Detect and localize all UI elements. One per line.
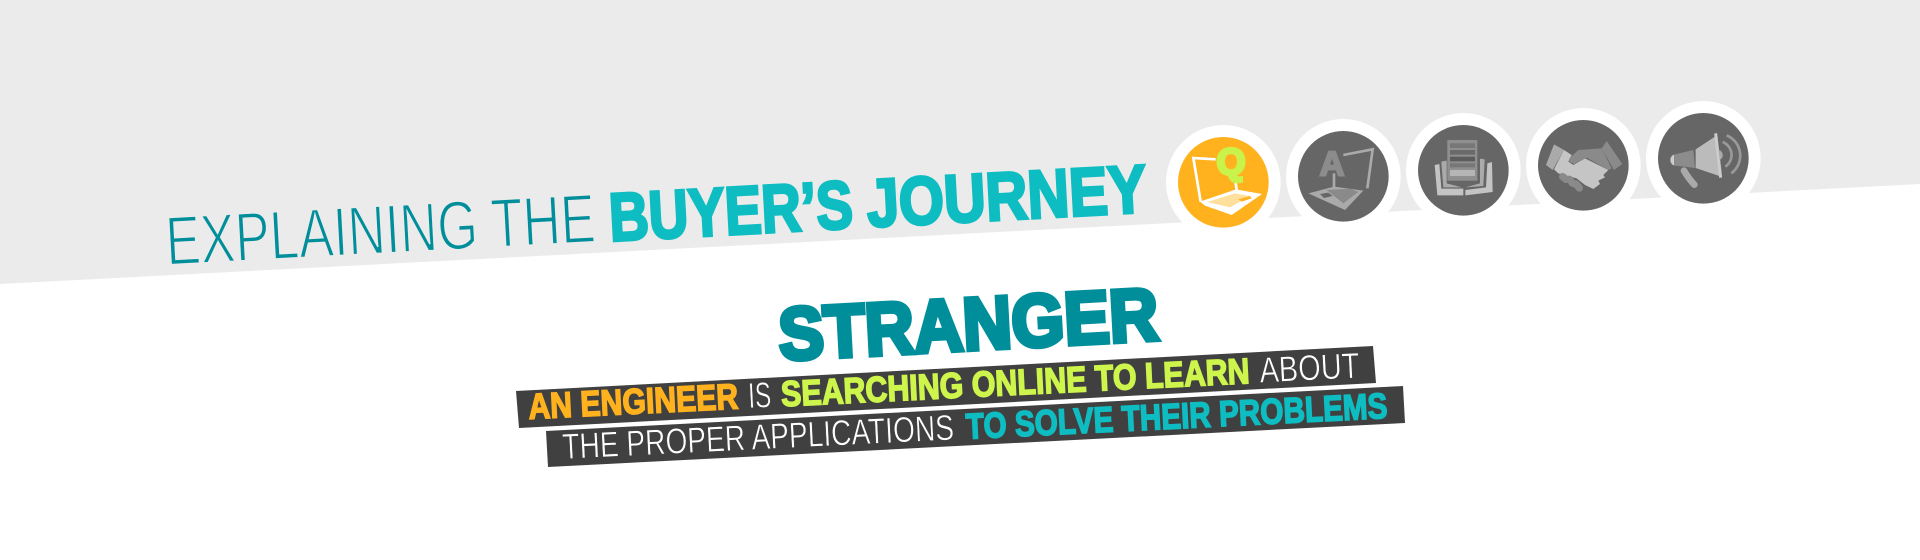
title: EXPLAINING THE — [164, 180, 597, 280]
icon: laptop answer — [1286, 119, 1401, 234]
text banner: line two: THE PROPER APPLICATIONS — [561, 407, 955, 467]
text banner: line one: SEARCHING ONLINE TO LEARN — [780, 350, 1251, 414]
text banner: line one — [516, 345, 1376, 428]
text banner: line two: TO SOLVE THEIR PROBLEMS — [965, 385, 1388, 447]
icon: laptop answer: A — [1319, 144, 1345, 183]
title: BUYER’S — [607, 167, 855, 256]
text banner: line one: AN ENGINEER — [527, 376, 739, 427]
text banner: line one: IS — [747, 374, 772, 416]
icon: laptop search (active stage): Q — [1216, 141, 1246, 183]
icon: laptop search (active stage) — [1166, 125, 1281, 240]
title — [164, 150, 1148, 280]
heading: stranger: STRANGER — [776, 273, 1160, 376]
icon: megaphone — [1646, 101, 1761, 216]
text banner: line two — [546, 385, 1405, 467]
title: JOURNEY — [865, 151, 1148, 242]
icon: book and document — [1406, 113, 1521, 228]
slanted grey header background — [0, 0, 1920, 284]
text banner: line one: ABOUT — [1258, 345, 1360, 391]
icon: handshake — [1526, 108, 1641, 223]
